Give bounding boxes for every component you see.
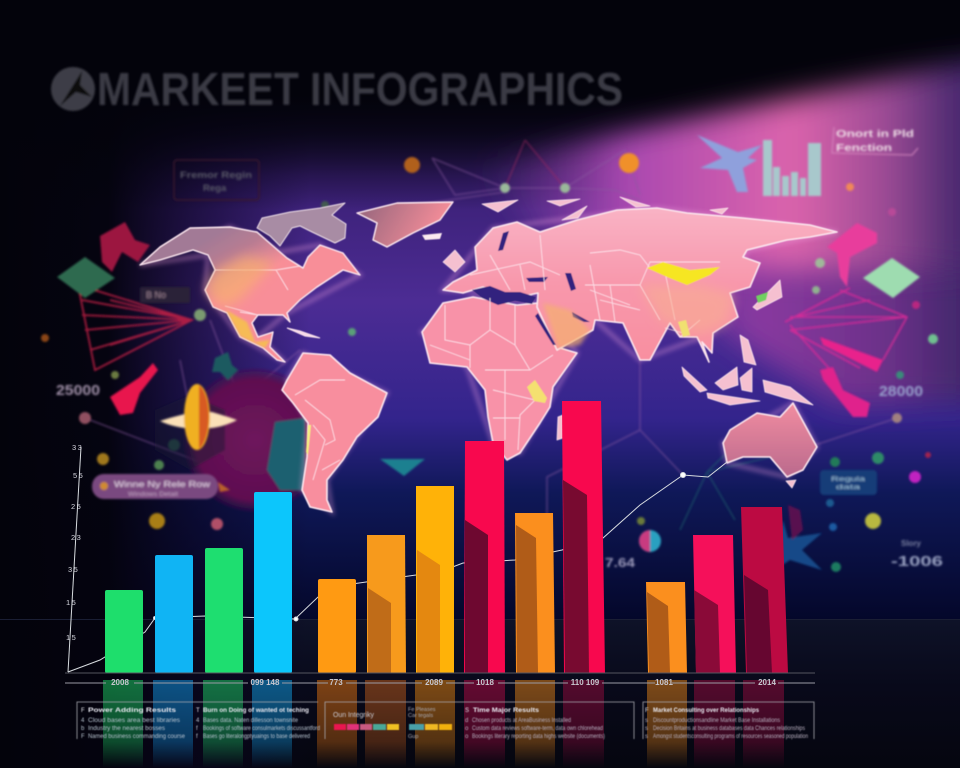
text block 4	[645, 707, 808, 740]
diamond: green right	[863, 258, 920, 298]
label: centre value: 7.64	[605, 555, 636, 570]
shape: thick pink bar	[820, 337, 883, 372]
axis ticks: 3 3	[72, 443, 82, 452]
bar 11 orange	[646, 582, 687, 673]
text block 4: s	[645, 734, 648, 740]
heat patch: North America	[206, 256, 275, 308]
axis	[68, 447, 81, 672]
text block 1: Power Adding Results	[88, 707, 176, 714]
label: small left box: B No	[146, 290, 166, 300]
continent: Australia	[723, 403, 817, 477]
right radial fan and red shapes	[785, 223, 920, 417]
side labels	[56, 287, 943, 570]
heat patch: Japan	[756, 292, 768, 303]
star: orange top	[404, 157, 420, 173]
text block 1: b	[81, 726, 85, 732]
shape: red lower left	[110, 363, 158, 415]
dark polygons behind map	[155, 352, 822, 570]
text block 4: s	[645, 726, 648, 732]
panel: outline left	[77, 702, 318, 739]
x axis and year labels	[65, 673, 815, 687]
callout: top right	[832, 127, 918, 155]
axis ticks: 5 5	[73, 471, 83, 480]
heat patch: Mexico	[226, 310, 270, 348]
axis ticks: 3 5	[68, 565, 78, 574]
label: left value: 25000	[56, 382, 100, 399]
panel: outline right	[643, 702, 814, 739]
heat patch: Arabia	[543, 303, 590, 348]
fan: pink right	[785, 288, 907, 375]
legend panels	[77, 702, 814, 740]
axis ticks: 1 5	[66, 598, 76, 607]
bar 6 orange	[367, 535, 406, 673]
top right chart icons	[697, 127, 918, 196]
bar 9 orange	[515, 513, 555, 673]
text block 2: f	[196, 734, 198, 740]
text block 1	[81, 707, 186, 740]
bar 12 crimson	[693, 535, 736, 673]
shape: pink top right	[827, 223, 877, 287]
text block 3: S	[465, 708, 469, 714]
bar chart	[105, 401, 788, 673]
text block 2: T	[196, 708, 200, 714]
continent: Eurasia	[443, 208, 837, 362]
text block 3: Chosen products at AreaBusiness Installed	[472, 718, 571, 724]
continent: Arctic islands	[257, 203, 346, 246]
label: lower right value: -1006	[891, 553, 943, 570]
trend line	[68, 462, 727, 672]
title: Market Infographics	[51, 63, 623, 115]
bar 1 green	[105, 590, 143, 673]
continent: North America	[140, 227, 360, 362]
panel: color scale: Oun Integriky	[333, 712, 374, 719]
text block 2: 4	[196, 718, 200, 724]
icon: blue star shape	[697, 135, 762, 192]
heat patch: East Africa	[527, 380, 547, 403]
map glow	[140, 208, 837, 512]
continent: Greenland	[357, 202, 453, 247]
x axis and year labels: 1018	[476, 678, 494, 687]
heat patch: Bangladesh	[678, 320, 690, 337]
text block 4: Amongst studentsconsulting programs of resources seasoned population	[653, 734, 808, 740]
island: Cuba	[287, 328, 320, 338]
country borders	[215, 235, 720, 480]
bar 3 green	[205, 548, 243, 673]
shape: red top left	[100, 222, 150, 272]
heat patch: China yellow	[647, 262, 720, 285]
bar 2 blue	[155, 555, 193, 673]
x axis and year labels: 110 109	[571, 678, 600, 687]
text block 2: Bases data. Naten dillesson townsnite	[203, 718, 299, 724]
x axis and year labels: 2014	[758, 678, 776, 687]
pill label: Windows Detait	[128, 492, 178, 498]
text block 3: d	[465, 718, 468, 724]
callout: right blue	[820, 470, 877, 495]
islands	[443, 197, 813, 488]
axis ticks: 2 3	[71, 533, 81, 542]
callout: right blue: Regula	[831, 476, 866, 483]
callout: top left: Rega	[203, 183, 227, 194]
icon: blue star	[775, 520, 822, 570]
bar 13 maroon	[741, 507, 788, 673]
callout: top right: Fenction	[836, 143, 892, 154]
text block 2: Bookings of software consulmarkets discussantford	[203, 726, 320, 732]
text block 2	[196, 707, 320, 740]
text block 4: Market Consulting over Relationships	[653, 707, 759, 714]
network background lines	[85, 140, 897, 530]
panel: color scale: Fe Pleases	[408, 707, 436, 713]
text block 3: o	[465, 726, 469, 732]
text block 1: Named business commanding course	[88, 734, 186, 740]
label: upper right value: Slory	[901, 539, 922, 548]
text block 4: Decision Britains at business databases data Chances relationships	[653, 726, 805, 732]
bar 5 orange	[318, 579, 356, 673]
line chart	[68, 447, 727, 672]
x axis and year labels: 773	[329, 678, 343, 687]
text block 1: Industry the nearest bosses	[88, 726, 165, 732]
text block 1: F	[81, 734, 85, 740]
panel: color scale: Car tegals	[408, 713, 433, 719]
text block 1: F	[81, 708, 85, 714]
callout: top left: Fremor Regin	[180, 170, 252, 181]
bar 7 amber	[416, 486, 454, 673]
world map	[140, 197, 837, 512]
pill label	[92, 474, 230, 499]
text block 2: Bases go literalongptyuaings to base delivered	[203, 734, 310, 740]
heat patch: China	[640, 285, 735, 335]
callout: right blue: data	[836, 485, 861, 491]
text block 2: f	[196, 726, 198, 732]
diamond: green left	[57, 257, 115, 298]
text block 1: 4	[81, 718, 85, 724]
text block 3: o	[465, 734, 469, 740]
callout: top right: Onort in Pld	[836, 129, 914, 140]
axis ticks: 2 5	[71, 502, 81, 511]
text block 3: Time Major Results	[473, 707, 539, 714]
text block 4: Discountproductionsandline Market Base Installations	[653, 718, 780, 724]
icon: logo	[51, 67, 95, 111]
text block 1: Cloud bases area best libraries	[88, 718, 180, 724]
text block 4: F	[645, 708, 649, 714]
callout: teal marker	[380, 459, 425, 476]
x axis and year labels: 2008	[111, 678, 129, 687]
star: orange right	[619, 153, 639, 173]
label: small left box	[140, 287, 190, 303]
label: right value: 28000	[879, 383, 923, 400]
title text: MARKEET INFOGRAPHICS	[97, 63, 623, 115]
pill label: Winne Ny Rele Row	[114, 479, 211, 489]
x axis and year labels: 2089	[425, 678, 443, 687]
inland seas	[472, 231, 590, 345]
bar reflections	[103, 680, 784, 768]
continent: South America	[282, 353, 387, 512]
panel: color scale	[325, 702, 634, 740]
panel: color scale: Gup	[408, 734, 418, 740]
axis ticks: 1 5	[66, 633, 76, 642]
text block 4: s	[645, 718, 648, 724]
text block 3	[465, 707, 605, 740]
x axis and year labels: 099 148	[251, 678, 280, 687]
text block 3: Custom data reviews software-term, data own chlorehead	[472, 726, 603, 732]
axis ticks	[66, 443, 83, 642]
decorative dots and stars	[41, 153, 938, 572]
text block 2: Burn on Doing of wanted ot teching	[203, 707, 309, 714]
heat patch: Chile	[306, 425, 311, 455]
orange spinning ornament	[160, 384, 237, 450]
left radial fan and red shapes	[57, 222, 192, 415]
bar 8 crimson	[464, 441, 505, 673]
bar 4 cyan	[254, 492, 292, 673]
text block 3: Bookings literary reporting data highs website (documents)	[472, 734, 605, 740]
island: Iceland	[422, 233, 442, 240]
fan: red left	[78, 285, 192, 370]
shape: pink lower right	[820, 367, 870, 417]
x axis and year labels: 1081	[655, 678, 673, 687]
icon: mini bar chart	[763, 140, 821, 196]
continent: Africa	[422, 297, 577, 460]
callout: top left	[174, 160, 259, 200]
bar 10 crimson	[562, 401, 605, 673]
